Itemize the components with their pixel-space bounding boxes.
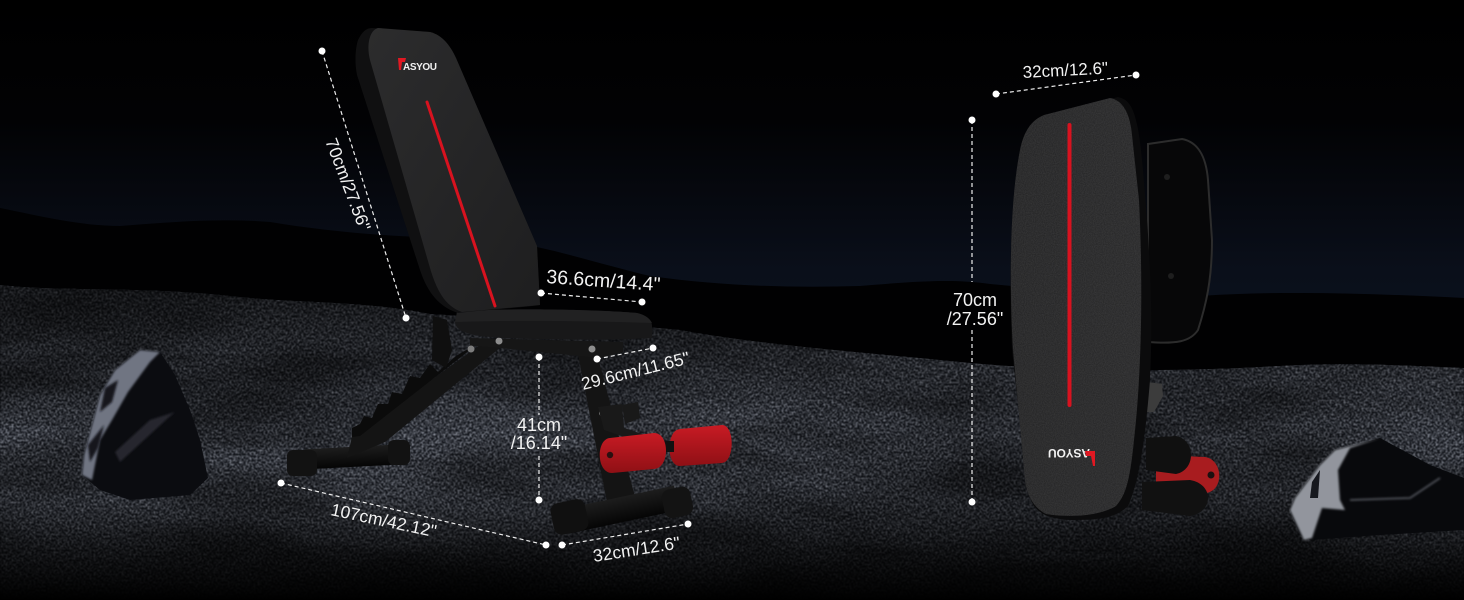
rear ratchet rail bbox=[347, 316, 502, 458]
ground bbox=[0, 270, 1464, 600]
folded backrest pad bbox=[1011, 97, 1151, 520]
bench, side view bbox=[287, 28, 732, 536]
logo: ASYOU bbox=[403, 62, 437, 73]
rock right bbox=[1290, 438, 1464, 540]
lower hardware and tubes bbox=[1142, 382, 1219, 516]
dimension: seat height bbox=[511, 354, 567, 504]
rear foot tube bbox=[287, 440, 410, 476]
rock left bbox=[82, 350, 208, 500]
dimension: seat height: /16.14" bbox=[511, 433, 567, 453]
leg pad arm bbox=[598, 402, 660, 448]
red stripe bbox=[1068, 123, 1072, 407]
dimension: pad height: 70cm bbox=[953, 290, 997, 310]
red leg pads bbox=[600, 425, 732, 473]
logo (inverted) bbox=[1048, 446, 1095, 466]
dimension: pad height: /27.56" bbox=[947, 309, 1003, 329]
dimension: foot width: 32cm/12.6" bbox=[591, 532, 681, 566]
dimension: pad width bbox=[992, 59, 1140, 98]
front leg bbox=[578, 354, 635, 502]
dimension: seat width: 29.6cm/11.65" bbox=[579, 348, 692, 394]
dimension: bench length: 107cm/42.12" bbox=[329, 499, 438, 541]
seat pad bbox=[455, 309, 652, 340]
bolts bbox=[496, 338, 502, 344]
dimension: seat length: 36.6cm/14.4" bbox=[546, 266, 661, 296]
dimension: backrest length: 70cm/27.56" bbox=[321, 135, 375, 234]
red stripe bbox=[427, 102, 495, 306]
rear seat pad bbox=[1148, 139, 1212, 343]
bench, folded front view bbox=[1011, 97, 1219, 520]
seat frame bbox=[470, 338, 623, 358]
dimension: seat height: 41cm bbox=[517, 415, 561, 435]
distant mountains bbox=[0, 208, 1464, 400]
front foot tube bbox=[549, 485, 695, 536]
dimension: backrest length bbox=[318, 48, 410, 322]
logo (inverted): ASYOU bbox=[1048, 446, 1090, 460]
dimension: pad height bbox=[947, 116, 1003, 506]
backrest bbox=[355, 28, 540, 313]
dimension: bench length bbox=[278, 480, 550, 548]
logo bbox=[398, 58, 437, 73]
dimension: pad width: 32cm/12.6" bbox=[1022, 59, 1109, 82]
dimension: foot width bbox=[558, 520, 692, 566]
